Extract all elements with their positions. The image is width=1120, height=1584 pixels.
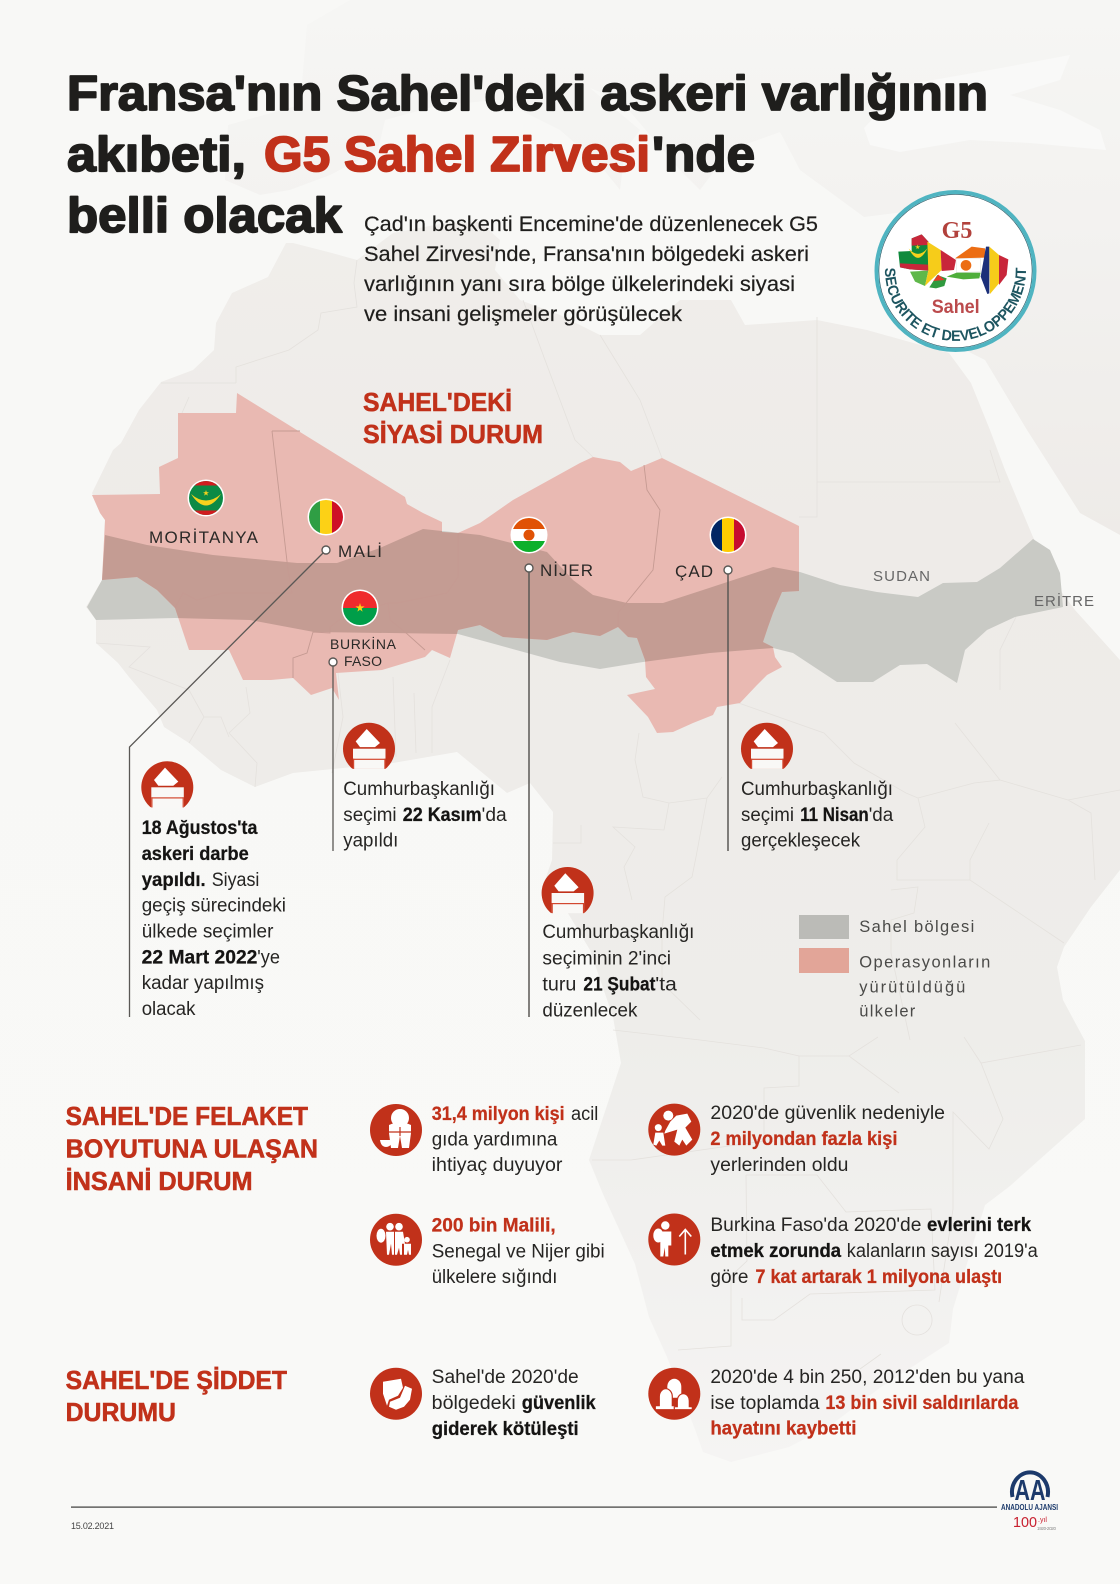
item: civilian deaths	[648, 1367, 1025, 1440]
icon: ballot box Burkina Faso	[343, 723, 395, 775]
item: security	[370, 1367, 596, 1440]
Niger callout text: 'ta	[655, 975, 677, 996]
displaced text: 2020'de güvenlik nedeniyle	[710, 1103, 945, 1124]
Burkina Faso displacement text: 7 kat artarak 1 milyona ulaştı	[755, 1267, 1002, 1288]
Chad callout text: 11 Nisan	[800, 805, 869, 826]
food aid text: ihtiyaç duyuyor	[432, 1155, 563, 1176]
title: Fransa'nın Sahel'deki askeri varlığının	[67, 67, 988, 121]
callout: Mali	[141, 761, 286, 1020]
title: G5 Sahel Zirvesi	[264, 128, 650, 182]
logo: Anadolu Ajansı	[1001, 1472, 1058, 1531]
Mali callout text: geçiş sürecindeki	[142, 896, 286, 917]
sea: Black Sea	[864, 55, 1106, 152]
security text: bölgedeki	[432, 1393, 516, 1414]
subtitle: ve insani gelişmeler görüşülecek	[364, 302, 682, 326]
Mali callout text: ülkede seçimler	[142, 922, 274, 943]
Niger callout text	[542, 922, 694, 1022]
civilian deaths text	[710, 1367, 1025, 1440]
food aid text	[432, 1104, 598, 1176]
logo: G5 Sahel	[874, 190, 1036, 352]
food aid text: acil	[571, 1104, 598, 1125]
subtitle: Çad'ın başkenti Encemine'de düzenlenecek G5	[364, 212, 818, 236]
flag: Mauritania	[188, 480, 224, 516]
refugees text: 200 bin Malili,	[432, 1216, 556, 1237]
heading: Sahel political situation	[363, 387, 543, 449]
flag: Mali	[308, 498, 344, 536]
security text	[432, 1367, 596, 1440]
security text: Sahel'de 2020'de	[432, 1367, 579, 1388]
title: belli olacak	[67, 189, 343, 243]
heading: violence situation: SAHEL'DE ŞİDDET	[66, 1365, 287, 1395]
civilian deaths text: 2020'de 4 bin 250, 2012'den bu yana	[710, 1367, 1025, 1388]
civilian deaths text: 13 bin sivil saldırılarda	[825, 1393, 1019, 1414]
country labels: ERİTRE	[1034, 592, 1094, 610]
icon: refugee family	[370, 1214, 422, 1266]
Niger callout text: düzenlecek	[542, 1001, 638, 1022]
callout: Chad	[741, 723, 894, 852]
country labels: FASO	[344, 653, 382, 669]
food aid text: 31,4 milyon kişi	[432, 1104, 565, 1125]
title: 'nde	[652, 128, 755, 182]
subtitle	[364, 212, 818, 326]
flag: Niger	[510, 516, 548, 554]
icon: person with arrow	[648, 1214, 700, 1266]
displaced text	[710, 1103, 945, 1176]
Burkina Faso displacement text	[710, 1215, 1038, 1288]
map: overlap of operations and Sahel band	[102, 529, 799, 662]
map country borders	[96, 260, 1120, 1369]
callout: Niger	[542, 867, 694, 1022]
Mali callout text: 22 Mart 2022	[142, 947, 257, 968]
Mali callout text: kadar yapılmış	[142, 973, 264, 994]
heading: humanitarian situation	[66, 1101, 318, 1196]
item: food aid	[370, 1104, 598, 1176]
heading: Sahel political situation: SİYASİ DURUM	[363, 419, 543, 449]
icon: hungry person	[370, 1104, 422, 1156]
Niger callout text: Cumhurbaşkanlığı	[542, 922, 694, 943]
subtitle: Sahel Zirvesi'nde, Fransa'nın bölgedeki askeri	[364, 242, 809, 266]
footer rule	[71, 1506, 997, 1508]
legend: Operasyonların	[859, 954, 990, 972]
background map: Europe and Middle East	[225, 0, 1120, 535]
curved motto: SECURITE ET DEVELOPPEMENT	[884, 268, 1026, 341]
country labels: SUDAN	[873, 568, 930, 585]
Burkina Faso callout text: 'da	[482, 805, 507, 826]
icon: ballot box Chad	[741, 723, 793, 775]
subtitle: varlığının yanı sıra bölge ülkelerindeki siyasi	[364, 272, 795, 296]
logo: Anadolu Ajansı: 1920-2020	[1037, 1526, 1056, 1531]
Burkina Faso callout text: 22 Kasım	[403, 805, 482, 826]
food aid text: gıda yardımına	[432, 1130, 558, 1151]
title	[67, 67, 988, 243]
Burkina Faso callout text: Cumhurbaşkanlığı	[343, 779, 495, 800]
title: akıbeti,	[67, 128, 246, 182]
legend: yürütüldüğü	[859, 979, 965, 997]
heading: humanitarian situation: BOYUTUNA ULAŞAN	[66, 1134, 318, 1164]
displaced text: 2 milyondan fazla kişi	[710, 1129, 897, 1150]
legend	[799, 915, 990, 1021]
icon: ballot box Niger	[542, 867, 594, 919]
Mali callout text: 18 Ağustos'ta	[142, 818, 258, 839]
civilian deaths text: hayatını kaybetti	[710, 1419, 856, 1440]
refugees text	[432, 1216, 605, 1288]
Niger callout text: 21 Şubat	[583, 975, 656, 996]
flag: Burkina Faso	[342, 590, 378, 626]
icon: gravestones	[648, 1368, 700, 1420]
logo: Anadolu Ajansı: AA	[1014, 1475, 1046, 1507]
refugees text: Senegal ve Nijer gibi	[432, 1242, 605, 1263]
item: Burkina Faso displacement	[648, 1214, 1038, 1288]
Chad callout text: Cumhurbaşkanlığı	[741, 779, 893, 800]
Mali callout text: yapıldı.	[142, 870, 206, 891]
map: Sahel region band	[87, 529, 1063, 683]
security text: güvenlik	[522, 1393, 596, 1414]
background map: Africa	[86, 222, 1120, 1462]
Mali callout text: olacak	[142, 999, 196, 1020]
Burkina Faso displacement text: göre	[710, 1267, 748, 1288]
item: refugees	[370, 1214, 605, 1288]
legend: Sahel bölgesi	[859, 918, 974, 936]
Burkina Faso callout text: seçimi	[343, 805, 397, 826]
flag: Chad	[710, 516, 746, 554]
Chad callout text: gerçekleşecek	[741, 831, 860, 852]
Burkina Faso displacement text: kalanların sayısı 2019'a	[847, 1241, 1038, 1262]
Chad callout text	[741, 779, 894, 852]
date: 15.02.2021	[71, 1521, 114, 1531]
Burkina Faso displacement text: Burkina Faso'da 2020'de	[710, 1215, 921, 1236]
heading: humanitarian situation: İNSANİ DURUM	[66, 1166, 253, 1196]
Sahel wordmark: Sahel	[932, 297, 980, 318]
icon: fleeing family	[648, 1104, 700, 1156]
icon: broken shield	[370, 1368, 422, 1420]
Mali callout text: askeri darbe	[142, 844, 249, 865]
heading: Sahel political situation: SAHEL'DEKİ	[363, 387, 512, 417]
Niger callout text: turu	[542, 975, 576, 996]
logo: Anadolu Ajansı: .yıl	[1038, 1517, 1047, 1524]
heading: violence situation: DURUMU	[66, 1397, 176, 1427]
Mali callout text	[142, 818, 286, 1020]
G5 wordmark: G5	[942, 218, 972, 244]
map: internal borders of operation countries	[175, 431, 660, 678]
Chad callout text: 'da	[869, 805, 894, 826]
Burkina Faso callout text: yapıldı	[343, 831, 398, 852]
Burkina Faso displacement text: evlerini terk	[927, 1215, 1031, 1236]
country labels: MALİ	[338, 542, 382, 561]
logo: Anadolu Ajansı: ANADOLU AJANSI	[1001, 1503, 1058, 1512]
refugees text: ülkelere sığındı	[432, 1267, 557, 1288]
callout: Burkina Faso	[343, 723, 507, 852]
country labels: NİJER	[540, 561, 593, 580]
country labels	[149, 528, 1094, 669]
leader lines and markers	[130, 546, 732, 1017]
security text: giderek kötüleşti	[432, 1419, 579, 1440]
Niger callout text: seçiminin 2'inci	[542, 948, 671, 969]
Chad callout text: seçimi	[741, 805, 794, 826]
country labels: ÇAD	[675, 562, 713, 581]
Mali callout text: 'ye	[257, 947, 280, 968]
country labels: MORİTANYA	[149, 528, 259, 547]
logo: Anadolu Ajansı: 100	[1013, 1514, 1037, 1531]
icon: ballot box Mali	[141, 761, 193, 813]
legend: ülkeler	[859, 1003, 916, 1021]
item: displaced	[648, 1103, 945, 1176]
heading: humanitarian situation: SAHEL'DE FELAKET	[66, 1101, 308, 1131]
country labels: BURKİNA	[330, 635, 397, 652]
Burkina Faso displacement text: etmek zorunda	[710, 1241, 842, 1262]
civilian deaths text: ise toplamda	[710, 1393, 820, 1414]
heading: violence situation	[66, 1365, 287, 1427]
Mali callout text: Siyasi	[212, 870, 259, 891]
map: operation countries	[92, 393, 799, 733]
displaced text: yerlerinden oldu	[710, 1155, 848, 1176]
Burkina Faso callout text	[343, 779, 507, 852]
